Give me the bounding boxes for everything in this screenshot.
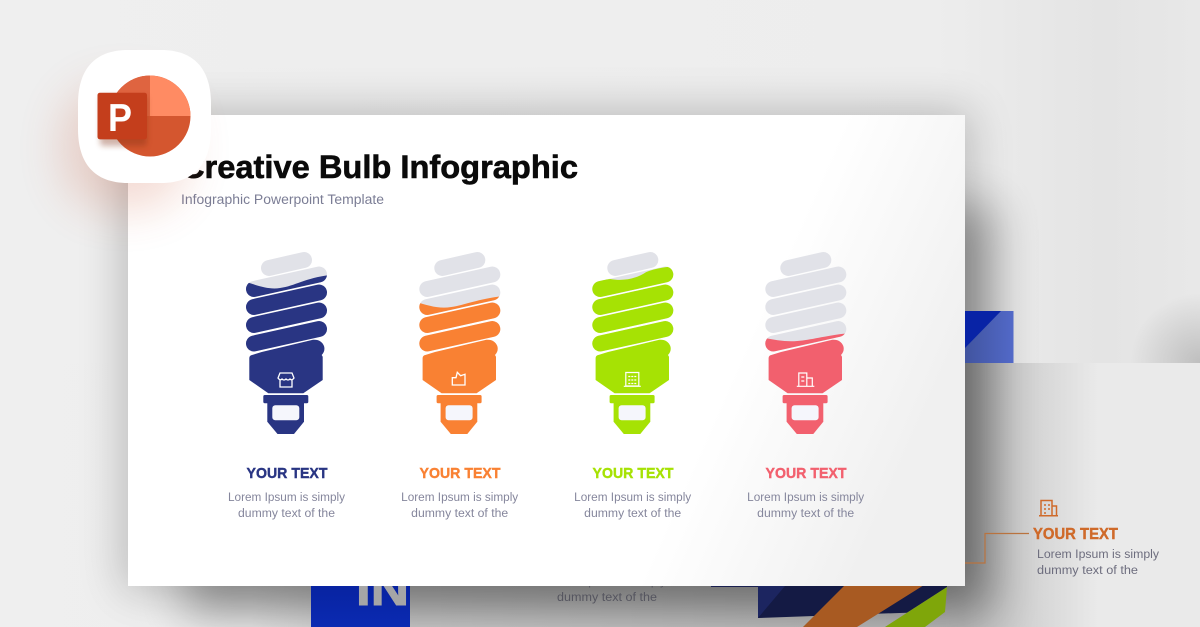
background: hidden text block [548, 576, 666, 604]
bulb 1: navy [249, 260, 324, 434]
background: hidden text block: dummy text of the [557, 592, 657, 604]
bulb 4: coral [769, 260, 844, 434]
bulb 2 heading: YOUR TEXT [420, 465, 500, 482]
bulb 3 body [574, 492, 691, 520]
bulb 4 heading: YOUR TEXT [766, 465, 846, 482]
callout body: dummy text of the [1037, 565, 1138, 577]
bulb 1 body [228, 492, 345, 520]
icon: store [278, 373, 294, 387]
bulb 1 body: dummy text of the [238, 508, 335, 520]
panel: main slide card [128, 115, 965, 586]
callout body [1037, 549, 1159, 577]
bulb 1 body: Lorem Ipsum is simply [228, 492, 345, 504]
background: connector line [711, 586, 758, 588]
background: lower slide [0, 363, 1200, 627]
bulb 2 body [401, 492, 518, 520]
icon glow [62, 85, 187, 210]
bulb 2 body: dummy text of the [411, 508, 508, 520]
icon: factory [452, 372, 465, 385]
background: hidden text block: Lorem Ipsum is simply [548, 576, 666, 588]
bulb 3 body: dummy text of the [584, 508, 681, 520]
main card strong shadow [185, 205, 995, 615]
background: diagonal ribbon shapes [758, 580, 947, 627]
callout body: Lorem Ipsum is simply [1037, 549, 1159, 561]
side callout: your text [965, 500, 1159, 577]
bulb 4 body: dummy text of the [757, 508, 854, 520]
callout heading: YOUR TEXT [1033, 526, 1119, 543]
bulb 3 heading: YOUR TEXT [592, 465, 674, 482]
icon: PowerPoint app badge [78, 50, 211, 183]
icon: buildings [797, 373, 814, 386]
bulb 3 body: Lorem Ipsum is simply [574, 492, 691, 504]
main card soft shadow [122, 110, 970, 592]
background: upper right corner shade [1130, 293, 1200, 363]
icon: building [1039, 500, 1058, 516]
bulb 2: orange [423, 260, 498, 434]
title: Creative Bulb Infographic [181, 149, 578, 185]
connector arrow [965, 534, 1029, 563]
bulb 1 heading: YOUR TEXT [246, 465, 328, 482]
bulb 4 body: Lorem Ipsum is simply [747, 492, 864, 504]
P tile: P [108, 97, 132, 140]
background: lower slide side shade [250, 363, 1100, 627]
background: blue slide fragment [965, 311, 1014, 363]
bulb 2 body: Lorem Ipsum is simply [401, 492, 518, 504]
pie circle [110, 76, 190, 156]
background: upper slide [0, 0, 1200, 363]
subtitle: Infographic Powerpoint Template [181, 192, 384, 207]
bulb 3: green [596, 260, 671, 434]
background: blue block with cropped letters: IN [356, 563, 409, 615]
background: blue block with cropped letters [311, 563, 410, 627]
icon: office [624, 372, 641, 386]
bulb 4 body [747, 492, 864, 520]
